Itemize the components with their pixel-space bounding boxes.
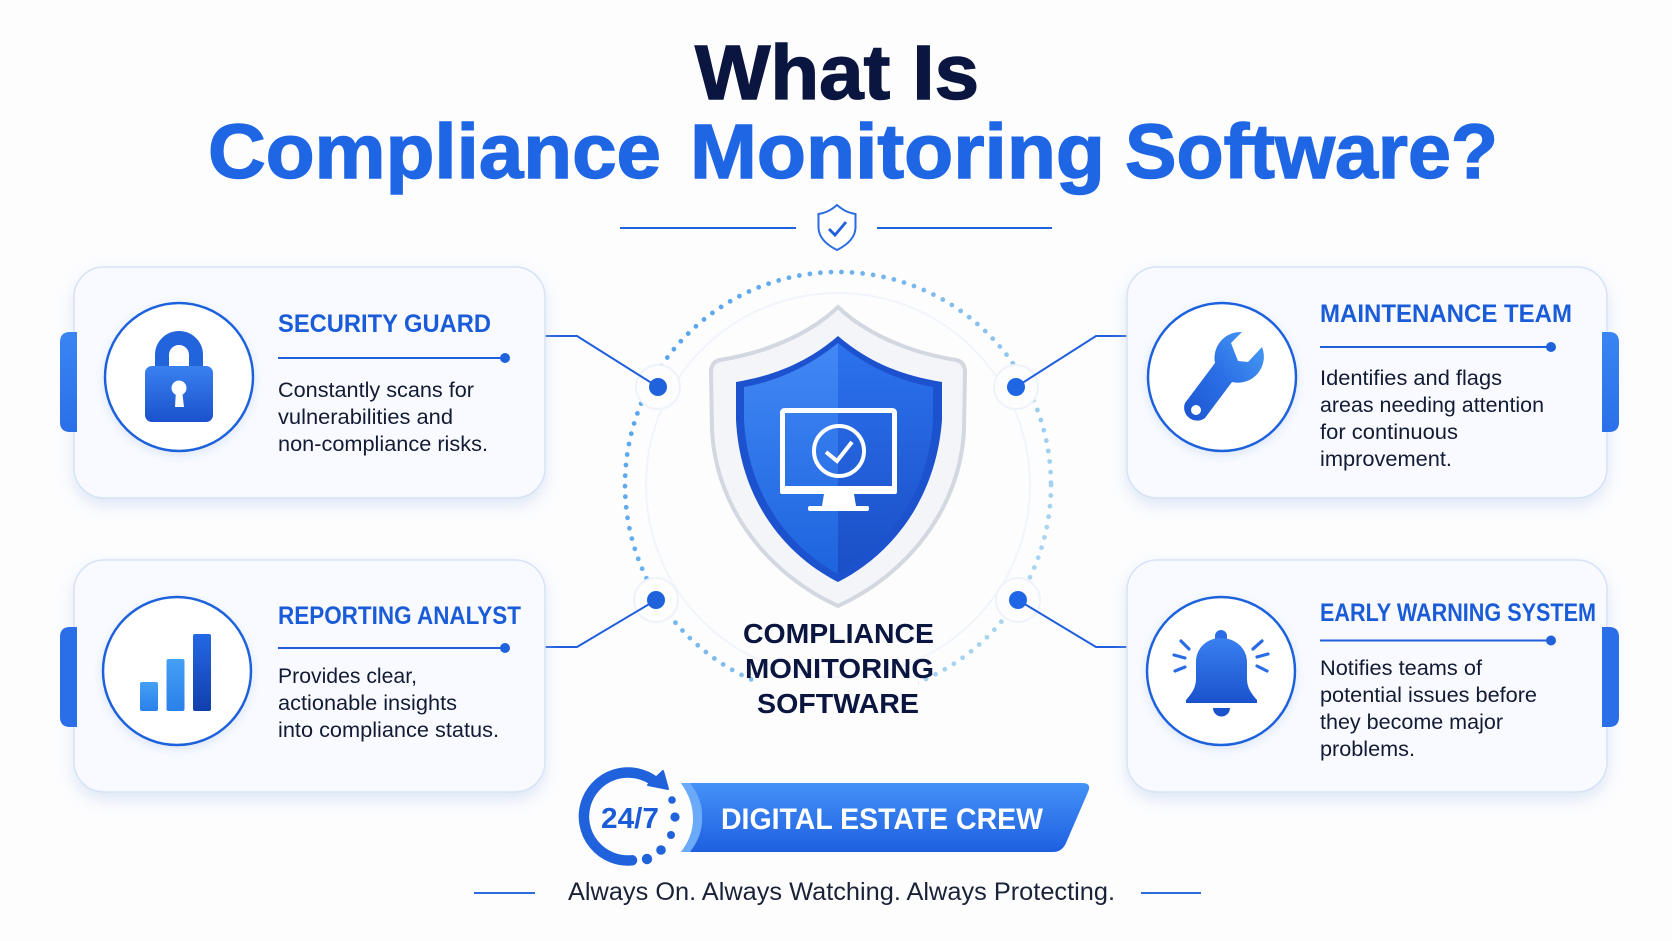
icon: 24/7 circular arrow [584,771,680,864]
panel: maintenance team [1127,267,1619,498]
heading: SECURITY GUARD [278,310,491,338]
shield left half [744,343,838,574]
description: areas needing attention [1320,393,1544,417]
shield outer frame [711,307,965,606]
description: actionable insights [278,691,457,715]
description [278,378,488,456]
dotted orbit ring around shield [625,272,1051,720]
description: Provides clear, [278,664,417,688]
panel: security guard [60,267,545,498]
icon: padlock [105,303,253,451]
center label: MONITORING [745,653,934,684]
heading rule [1320,342,1556,352]
heading: EARLY WARNING SYSTEM [1320,599,1596,627]
heading: REPORTING ANALYST [278,602,521,630]
title [208,30,1498,195]
shield right half [838,343,933,574]
panel: reporting analyst [60,560,545,792]
heading: MAINTENANCE TEAM [1320,300,1572,328]
description: vulnerabilities and [278,405,453,429]
title: Compliance [208,109,661,195]
center label [743,618,934,719]
icon: bell [1147,597,1295,745]
title: What Is [695,30,979,116]
description [1320,366,1544,471]
description: Constantly scans for [278,378,474,402]
icon: wrench [1148,303,1296,451]
description: Notifies teams of [1320,656,1482,680]
icon: bar chart [103,597,251,745]
connector nodes [647,378,1027,609]
description: potential issues before [1320,683,1537,707]
description: problems. [1320,737,1415,761]
monitor icon [780,410,897,511]
banner: digital estate crew [681,783,1089,852]
accent tab [60,332,77,432]
title divider with shield icon [620,205,1052,250]
description: non-compliance risks. [278,432,488,456]
icon: 24/7 circular arrow: 24/7 [601,803,659,835]
center label: SOFTWARE [757,688,919,719]
description: they become major [1320,710,1503,734]
banner: digital estate crew: DIGITAL ESTATE CREW [721,803,1044,836]
description [278,664,499,742]
heading rule [278,353,510,363]
central shield [711,307,965,606]
heading rule [278,643,510,653]
accent tab [1602,332,1619,432]
shield inner blue [736,336,942,582]
description [1320,656,1537,761]
description: Identifies and flags [1320,366,1502,390]
connector lines [545,336,1127,647]
panel: early warning system [1127,560,1619,792]
accent tab [1602,627,1619,727]
tagline: Always On. Always Watching. Always Protecting. [568,878,1115,906]
description: for continuous [1320,420,1458,444]
center label: COMPLIANCE [743,618,934,649]
accent tab [60,627,77,727]
title: Monitoring [690,109,1105,195]
heading rule [1320,636,1556,646]
description: improvement. [1320,447,1452,471]
title: Software? [1125,109,1498,195]
description: into compliance status. [278,718,499,742]
